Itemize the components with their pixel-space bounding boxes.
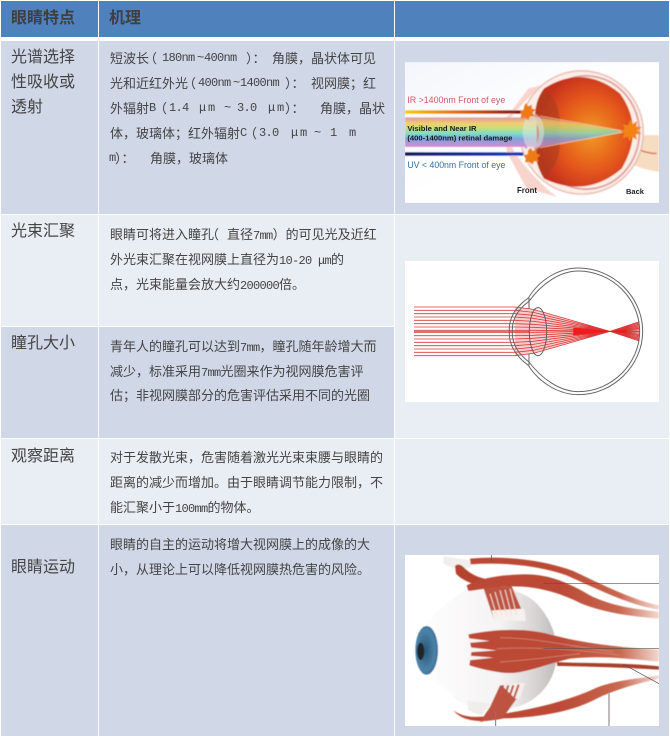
- label: visible and near IR: Visible and Near IR: [407, 124, 477, 133]
- mechanism text: wavelengths: ）：: [285, 101, 305, 116]
- mechanism text: wavelengths: ）：: [285, 76, 305, 91]
- image panel: beam focusing eye diagram: [395, 215, 669, 438]
- mechanism text: wavelengths: μ: [291, 126, 298, 140]
- row: eye movement: [1, 525, 669, 736]
- image panel: spectral eye diagram: [395, 41, 669, 214]
- mechanism text: wavelengths: m: [277, 101, 284, 115]
- mechanism text: distance: [99, 439, 394, 524]
- label: eye movement: [1, 525, 98, 736]
- header row: [1, 1, 669, 37]
- row: beam focusing: [1, 215, 394, 326]
- diagram: rays focused on retina: [405, 261, 659, 402]
- mechanism text: wavelengths: ~: [233, 76, 240, 90]
- mechanism text: wavelengths: ~: [197, 51, 204, 65]
- header cell: eye characteristics: [1, 1, 98, 37]
- mechanism text: wavelengths: B: [149, 101, 156, 115]
- mechanism text: wavelengths: 角膜，晶状体可见: [272, 51, 376, 66]
- mechanism text: distance: 距离的减少而增加。由于眼睛调节能力限制，不: [110, 475, 383, 490]
- mechanism text: wavelengths: 400nm: [204, 51, 237, 65]
- mechanism text: focusing: [99, 215, 394, 326]
- mechanism text: wavelengths: m: [208, 101, 215, 115]
- iris: [415, 626, 438, 675]
- mechanism text: wavelengths: 180nm: [162, 51, 195, 65]
- mechanism text: wavelengths: ）：: [246, 51, 266, 66]
- label: retinal damage: (400-1400nm) retinal damage: [407, 134, 512, 142]
- mechanism text: pupil: [99, 327, 394, 438]
- mechanism text: focusing: 外光束汇聚在视网膜上直径为10-20 μm的: [110, 252, 344, 268]
- mechanism text: wavelengths: m: [349, 126, 356, 140]
- mechanism text: focusing: 眼睛可将进入瞳孔（ 直径7mm）的可见光及近红: [110, 227, 377, 243]
- label: observation distance: 观察距离: [11, 448, 75, 465]
- diagram: eye muscles: [405, 555, 659, 726]
- label: eye movement: 眼睛运动: [11, 559, 75, 576]
- mechanism text: pupil: 青年人的瞳孔可以达到7mm，瞳孔随年龄增大而: [110, 339, 377, 355]
- mechanism text: movement: 眼睛的自主的运动将增大视网膜上的成像的大: [110, 537, 370, 552]
- label: pupil size: 瞳孔大小: [11, 335, 75, 352]
- label: pupil size: [1, 327, 98, 438]
- mechanism text: wavelengths: 3.0: [237, 101, 257, 115]
- label: beam focusing: [1, 215, 98, 326]
- mechanism text: wavelengths: （: [244, 126, 257, 141]
- mechanism text: pupil: 减少，标准采用7mm光圈来作为视网膜危害评: [110, 364, 364, 380]
- mechanism text: wavelengths: 短波长: [110, 51, 149, 66]
- mechanism text: wavelengths: [99, 41, 394, 214]
- mechanism text: movement: 小，从理论上可以降低视网膜热危害的风险。: [110, 562, 370, 577]
- mechanism text: wavelengths: 角膜，晶状: [320, 101, 385, 116]
- mechanism text: wavelengths: 视网膜；红: [311, 76, 376, 91]
- mechanism text: distance: 能汇聚小于100mm的物体。: [110, 500, 260, 516]
- header cell: eye characteristics: 眼睛特点: [11, 10, 75, 27]
- mechanism text: wavelengths: 3.0: [259, 126, 279, 140]
- mechanism text: wavelengths: ）：: [115, 151, 135, 166]
- mechanism text: wavelengths: 体，玻璃体；红外辐射: [110, 126, 240, 141]
- mechanism text: wavelengths: （: [144, 51, 157, 66]
- row: observation distance: [1, 439, 669, 524]
- mechanism text: wavelengths: μ: [199, 101, 206, 115]
- mechanism text: wavelengths: 角膜，玻璃体: [150, 151, 228, 166]
- label: back: Back: [626, 187, 645, 196]
- label: spectral selectivity: [1, 41, 98, 214]
- mechanism text: pupil: 估；非视网膜部分的危害评估采用不同的光圈: [110, 388, 370, 403]
- mechanism text: distance: 对于发散光束，危害随着激光光束束腰与眼睛的: [110, 450, 383, 465]
- label: spectral selectivity: 性吸收或: [11, 74, 75, 91]
- mechanism text: wavelengths: ~: [224, 101, 231, 115]
- mechanism text: wavelengths: 外辐射: [110, 101, 149, 116]
- row: pupil size: [1, 327, 394, 438]
- image panel: eye muscles: [395, 525, 669, 736]
- mechanism text: wavelengths: 400nm: [198, 76, 231, 90]
- label: IR: IR >1400nm Front of eye: [407, 95, 505, 105]
- mechanism text: wavelengths: 光和近红外光: [110, 76, 188, 91]
- mechanism text: wavelengths: 1: [330, 126, 337, 140]
- eyeball: [415, 587, 557, 710]
- diagram: eye wavelength absorption: [405, 62, 659, 719]
- label: spectral selectivity: 透射: [11, 99, 43, 116]
- header cell: mechanism: [99, 1, 394, 37]
- mechanism text: wavelengths: 1400nm: [240, 76, 279, 90]
- label: beam focusing: 光束汇聚: [11, 223, 75, 240]
- label: UV: UV < 400nm Front of eye: [407, 160, 505, 170]
- mechanism text: wavelengths: ~: [314, 126, 321, 140]
- mechanism text: wavelengths: （: [183, 76, 196, 91]
- label: front: Front: [517, 186, 537, 195]
- mechanism text: focusing: 点，光束能量会放大约200000倍。: [110, 277, 305, 293]
- mechanism text: wavelengths: （: [154, 101, 167, 116]
- mechanism text: wavelengths: 1.4: [169, 101, 189, 115]
- header cell: blank: [395, 1, 669, 37]
- mechanism text: wavelengths: μ: [268, 101, 275, 115]
- mechanism text: wavelengths: C: [240, 126, 247, 140]
- mechanism text: wavelengths: m: [300, 126, 307, 140]
- mechanism text: wavelengths: m: [109, 151, 116, 165]
- blank cell: [395, 439, 669, 524]
- mechanism text: movement: [99, 525, 394, 736]
- label: spectral selectivity: 光谱选择: [11, 49, 75, 66]
- label: observation distance: [1, 439, 98, 524]
- header cell: mechanism: 机理: [109, 10, 141, 27]
